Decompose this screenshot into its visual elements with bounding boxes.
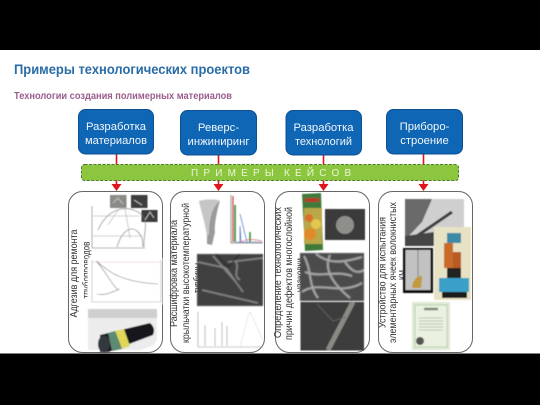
chart: adhesion curves	[88, 258, 162, 305]
text: устройство для испытания	[378, 202, 409, 343]
box: Разработка материалов: материалов	[85, 135, 147, 147]
green banner: примеры кейсов	[82, 164, 458, 180]
text: устройство для испытания: Устройство для испытания	[378, 217, 388, 328]
box: Разработка материалов: Разработка	[86, 121, 147, 133]
text: расшифровка материала: турбины	[192, 263, 204, 293]
image: SEM thumbnails	[110, 195, 158, 222]
box: Разработка технологий: технологий	[295, 136, 352, 148]
arrows from boxes to panels	[112, 154, 428, 191]
image: SEM fibres	[300, 253, 364, 301]
panel 4: устройство для испытания	[378, 192, 472, 352]
image: SEM particle	[325, 209, 365, 240]
image: repaired pipe	[88, 309, 157, 352]
chart: phase diagram	[92, 206, 146, 248]
text: устройство для испытания: КМ	[398, 270, 409, 280]
image: SEM fibre cell	[405, 199, 464, 246]
top black band	[0, 0, 540, 50]
text: определение технологических причин: Определение технологических	[273, 207, 284, 338]
box: Реверс-инжиниринг: Реверс-	[198, 122, 239, 134]
green banner: примеры кейсов: КЕЙСОВ	[284, 166, 356, 179]
panel 2: расшифровка материала	[168, 192, 264, 352]
image: SEM of material	[197, 254, 263, 306]
box: Приборостроение	[386, 110, 462, 154]
chart: spectrum	[231, 195, 263, 243]
bottom black band	[0, 354, 540, 405]
text: расшифровка материала	[168, 203, 204, 343]
text: определение технологических причин	[273, 207, 306, 340]
box: Приборостроение: Приборо-	[400, 121, 450, 133]
text: адгезив для ремонта	[69, 229, 92, 318]
text: адгезив для ремонта: трубопроводов	[80, 241, 92, 298]
panel 3: определение причин дефектов	[273, 192, 370, 352]
box: Разработка технологий	[286, 110, 362, 155]
green banner: примеры кейсов: ПРИМЕРЫ	[191, 168, 279, 179]
title: Примеры технологических проектов	[14, 61, 250, 77]
text: устройство для испытания: элементарных ячеек волокнистых	[388, 202, 399, 343]
icon: turbine blade	[199, 200, 220, 245]
text: определение технологических причин: причин дефектов многослойной	[284, 207, 295, 340]
image: SEM single fibre	[300, 302, 364, 350]
text: определение технологических причин: упаковки	[295, 258, 306, 292]
subtitle: Технологии создания полимерных материалов	[14, 91, 232, 102]
image: testing machine photo	[434, 227, 471, 300]
image: certificate	[412, 302, 450, 350]
chart: scatter plot	[198, 312, 263, 347]
text: адгезив для ремонта: Адгезив для ремонта	[69, 229, 80, 318]
panel 1: адгезив	[68, 192, 162, 352]
box: Разработка технологий: Разработка	[294, 122, 354, 134]
image: fibre specimen closeup	[403, 248, 433, 293]
box: Реверс-инжиниринг	[180, 110, 256, 155]
box: Приборостроение: строение	[400, 135, 449, 147]
box: Разработка материалов	[78, 110, 154, 154]
image: juice carton	[302, 193, 323, 251]
text: расшифровка материала: Расшифровка материала	[168, 220, 180, 327]
box: Реверс-инжиниринг: инжиниринг	[188, 136, 250, 148]
text: расшифровка материала: крыльчатки высокотемпературной	[181, 203, 192, 343]
